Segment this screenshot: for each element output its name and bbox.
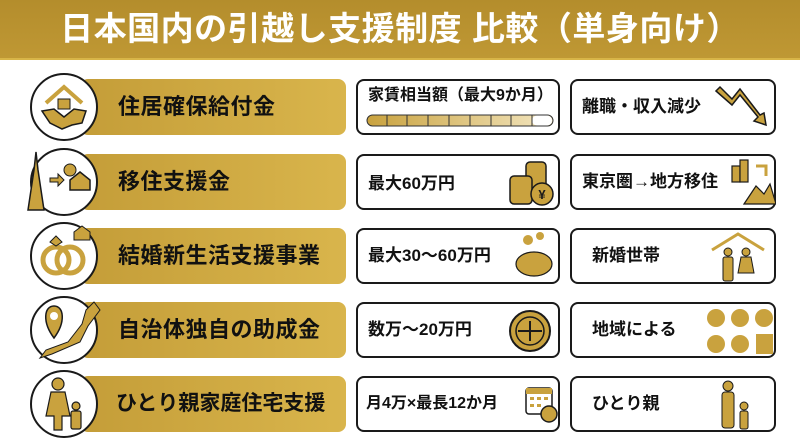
label bar (80, 154, 346, 210)
middle box: 月4万×最長12か月 (366, 395, 498, 412)
icon: house and handshake (30, 73, 98, 141)
icon: coins (509, 161, 554, 206)
row 5: ひとり親家庭住宅支援 (30, 370, 776, 438)
icon: city to mountains (731, 159, 776, 205)
label bar: 自治体独自の助成金 (118, 317, 321, 342)
right box: job loss (570, 79, 776, 135)
icon: couple under roof (711, 232, 765, 282)
middle box (356, 302, 560, 358)
icon: regional icons grid (707, 309, 773, 354)
right box (570, 302, 776, 358)
label bar: 住居確保給付金 (118, 94, 276, 119)
middle box (356, 228, 560, 284)
middle box (356, 154, 560, 210)
icon: calendar clock (525, 387, 558, 423)
right box: ひとり親 (592, 394, 660, 413)
title: 日本国内の引越し支援制度 比較（単身向け） (60, 10, 740, 47)
icon: rings (30, 222, 98, 290)
icon: map pin and Japan (30, 296, 98, 364)
row 2: 移住支援金 (27, 148, 776, 216)
middle box: rent: 家賃相当額（最大9か月） (368, 87, 553, 104)
row 3: 結婚新生活支援事業 (30, 222, 776, 290)
icon: coins: ¥ (538, 187, 546, 202)
icon: tower to countryside (30, 148, 98, 216)
right box (570, 154, 776, 210)
icon: piggy bank (515, 232, 553, 277)
progress bar (366, 114, 554, 126)
right box (570, 376, 776, 432)
row 4: 自治体独自の助成金 (30, 296, 776, 364)
middle box: 数万〜20万円 (368, 320, 472, 339)
middle box (356, 376, 560, 432)
icon: emblem coin (509, 310, 551, 352)
label bar (80, 228, 346, 284)
row 1: 住居確保給付金 (30, 73, 776, 141)
icon: parent and child (30, 370, 98, 438)
right box: 地域による (592, 320, 676, 339)
label bar (80, 79, 346, 135)
label bar: ひとり親家庭住宅支援 (116, 392, 325, 415)
middle box: rent (356, 79, 560, 135)
icon: parent and child (722, 380, 748, 430)
label bar: 移住支援金 (118, 169, 231, 194)
icon: down arrow (715, 86, 767, 126)
right box: 東京圏→地方移住 (582, 172, 718, 191)
label bar: 結婚新生活支援事業 (118, 243, 321, 268)
middle box: 最大60万円 (368, 174, 455, 193)
label bar (80, 376, 346, 432)
title (0, 0, 800, 60)
label bar (80, 302, 346, 358)
right box: 新婚世帯 (592, 246, 660, 265)
middle box: 最大30〜60万円 (368, 246, 491, 265)
right box (570, 228, 776, 284)
right box: job loss: 離職・収入減少 (582, 97, 701, 116)
